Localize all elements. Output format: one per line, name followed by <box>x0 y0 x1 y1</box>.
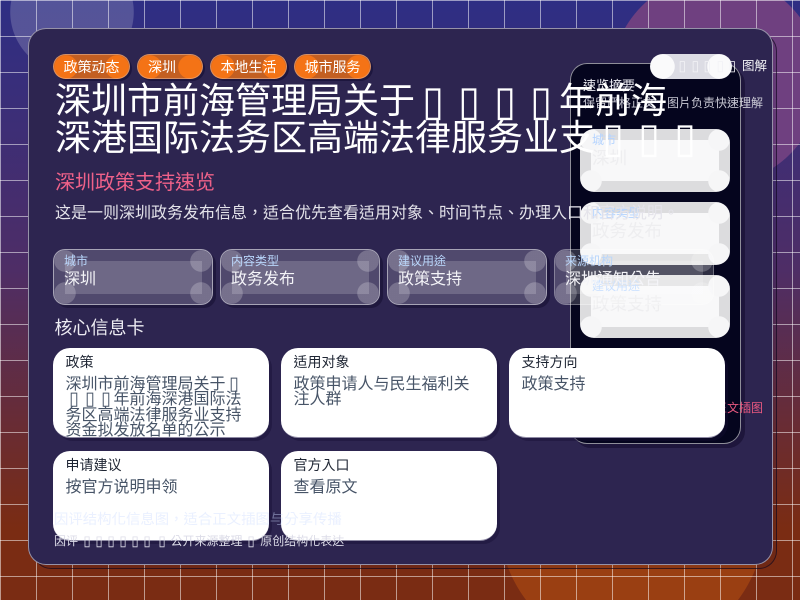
metric: suggested use <box>387 249 547 305</box>
mini card: content type <box>580 202 730 265</box>
card: policy: ▯ <box>69 390 78 409</box>
footer source: ▯ <box>119 533 126 549</box>
metric: source: 来源机构 <box>565 254 613 268</box>
metric: source <box>554 249 714 305</box>
footer source: ▯ <box>107 533 114 549</box>
badge text: 图解 <box>742 59 767 73</box>
metric: suggested use: 建议用途 <box>398 254 446 268</box>
title: ▯ <box>530 77 552 124</box>
footer source: ▯ <box>143 533 150 549</box>
card: audience: 适用对象 <box>294 354 350 370</box>
mini card: content type: 内容类型 <box>592 206 640 220</box>
badge text: ▯ <box>691 58 699 74</box>
metric: city: 城市 <box>64 254 88 268</box>
tag: local life: 本地生活 <box>220 59 276 75</box>
card: audience <box>281 348 496 438</box>
mini card: suggested use: 建议用途 <box>592 279 640 293</box>
card: policy <box>53 348 268 438</box>
title: ▯ <box>674 113 696 160</box>
metric: source: 深圳通知公告 <box>565 271 661 288</box>
title: ▯ <box>638 113 660 160</box>
footer source: ▯ <box>248 533 255 549</box>
footer source: ▯ <box>131 533 138 549</box>
description: 这是一则深圳政务发布信息，适合优先查看适用对象、时间节点、办理入口和官方说明。 <box>55 205 679 222</box>
metric: content type: 内容类型 <box>231 254 279 268</box>
tag: Shenzhen <box>137 54 203 79</box>
badge text <box>678 58 767 74</box>
card: direction <box>509 348 724 438</box>
card: official entry: 查看原文 <box>294 478 358 496</box>
card: audience: 注人群 <box>294 391 342 408</box>
footer source: ▯ <box>158 533 165 549</box>
mini card: city: 城市 <box>592 133 616 147</box>
title: ▯ <box>494 77 516 124</box>
card: policy: ▯ <box>101 390 110 409</box>
tag: Shenzhen: 深圳 <box>148 59 176 75</box>
mini card: suggested use: 政策支持 <box>592 294 662 314</box>
section heading: 核心信息卡 <box>54 318 144 338</box>
mini card: city <box>580 129 730 192</box>
tag: city services <box>294 54 371 79</box>
title: 深圳市前海管理局关于 年前海 <box>55 80 667 121</box>
metric: suggested use: 政策支持 <box>398 271 462 288</box>
tag: local life <box>210 54 287 79</box>
pink caption behind cards: 适合正文插图 <box>691 401 763 415</box>
title <box>55 77 696 160</box>
aside subtitle: 保留严格正文，图片负责快速理解 <box>583 96 763 110</box>
card: policy: 深圳市前海管理局关于 <box>66 376 226 392</box>
footer source: ▯ <box>83 533 90 549</box>
mini card: city: 深圳 <box>592 148 627 168</box>
subtitle: 深圳政策支持速览 <box>55 172 215 194</box>
metric: city <box>53 249 213 305</box>
card: policy: ▯ <box>85 390 94 409</box>
card: direction: 支持方向 <box>522 354 578 370</box>
metric: city: 深圳 <box>64 271 96 288</box>
badge text: ▯ <box>703 58 711 74</box>
badge text: ▯ <box>678 58 686 74</box>
mini card: suggested use <box>580 275 730 338</box>
title: ▯ <box>458 77 480 124</box>
card: application advice: 申请建议 <box>66 457 122 473</box>
tag: policy news: 政策动态 <box>64 59 120 75</box>
card: policy: 务区高端法律服务业支持 <box>66 406 242 424</box>
footer source: ▯ <box>95 533 102 549</box>
card: policy: 资金拟发放名单的公示 <box>66 422 226 439</box>
footer source: 因评 公开来源整理 原创结构化表达 <box>54 534 344 548</box>
metric: content type: 政务发布 <box>231 271 295 288</box>
title: ▯ <box>602 113 624 160</box>
aside heading: 速览摘要 <box>583 78 635 93</box>
title: ▯ <box>422 77 444 124</box>
card: policy: ▯ <box>229 374 238 394</box>
card: official entry <box>281 451 496 541</box>
card: application advice: 按官方说明申领 <box>66 478 178 496</box>
card: audience: 政策申请人与民生福利关 <box>294 376 470 392</box>
card: application advice <box>53 451 268 541</box>
top-right badge <box>650 54 732 79</box>
mini card: content type: 政务发布 <box>592 221 662 241</box>
badge text: ▯ <box>728 58 736 74</box>
tag: policy news <box>53 54 130 79</box>
tag: city services: 城市服务 <box>304 59 360 75</box>
card: official entry: 官方入口 <box>294 457 350 473</box>
aside panel: quick summary <box>570 63 741 444</box>
card: policy: 政策 <box>66 354 94 370</box>
card: direction: 政策支持 <box>522 376 586 392</box>
metric: content type <box>220 249 380 305</box>
badge text: ▯ <box>716 58 724 74</box>
title: 深港国际法务区高端法律服务业支 <box>55 116 595 158</box>
footer note: 因评结构化信息图，适合正文插图与分享传播 <box>54 512 342 528</box>
card: policy: 年前海深港国际法 <box>114 391 242 408</box>
